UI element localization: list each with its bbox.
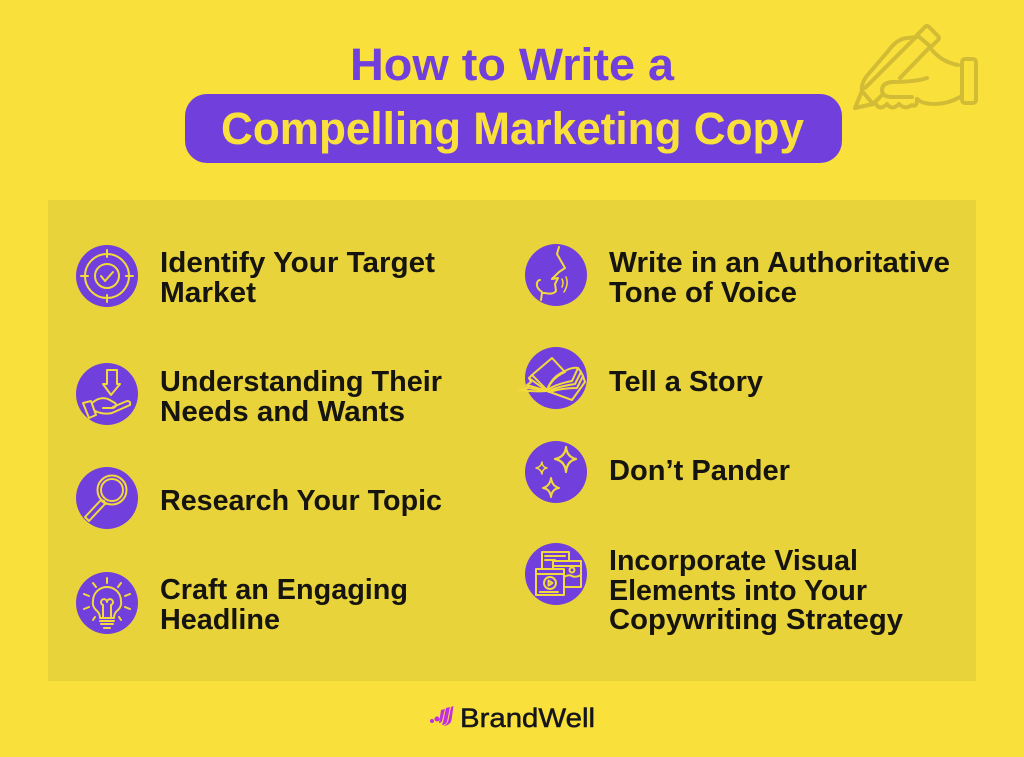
step: Understanding Their Needs and Wants [76, 363, 442, 428]
panel: steps [48, 200, 976, 681]
title banner [185, 94, 842, 163]
step: Incorporate Visual Elements into Your Copywriting Strategy: Copywriting Strategy [609, 604, 903, 636]
step: Incorporate Visual Elements into Your Copywriting Strategy: Elements into Your [609, 575, 867, 607]
step: Write in an Authoritative Tone of Voice: Write in an Authoritative [609, 247, 950, 279]
step: Identify Your Target Market [76, 245, 436, 309]
step: Tell a Story [519, 347, 763, 409]
step: Incorporate Visual Elements into Your Copywriting Strategy: Incorporate Visual [609, 545, 858, 577]
step: Incorporate Visual Elements into Your Copywriting Strategy [525, 543, 903, 636]
step: Tell a Story: Tell a Story [609, 366, 763, 398]
step: Craft an Engaging Headline: Headline [160, 604, 280, 636]
title line: How to Write a [350, 39, 675, 90]
step: Craft an Engaging Headline [76, 572, 408, 636]
step: Write in an Authoritative Tone of Voice [525, 244, 950, 309]
step: Understanding Their Needs and Wants: Understanding Their [160, 366, 442, 398]
step: Don't Pander [525, 441, 790, 503]
step: Identify Your Target Market: Market [160, 277, 257, 309]
title banner: Compelling Marketing Copy [221, 103, 804, 154]
step: Research Your Topic: Research Your Topic [160, 485, 442, 517]
step: Don't Pander: Don’t Pander [609, 455, 790, 487]
icon: hand writing with pencil [855, 26, 976, 108]
step: Write in an Authoritative Tone of Voice: Tone of Voice [609, 277, 797, 309]
logo: BrandWell: BrandWell [460, 703, 595, 733]
step: Understanding Their Needs and Wants: Needs and Wants [160, 396, 405, 428]
step: Research Your Topic [76, 467, 442, 529]
step: Identify Your Target Market: Identify Your Target [160, 247, 436, 279]
step: Craft an Engaging Headline: Craft an Engaging [160, 574, 408, 606]
